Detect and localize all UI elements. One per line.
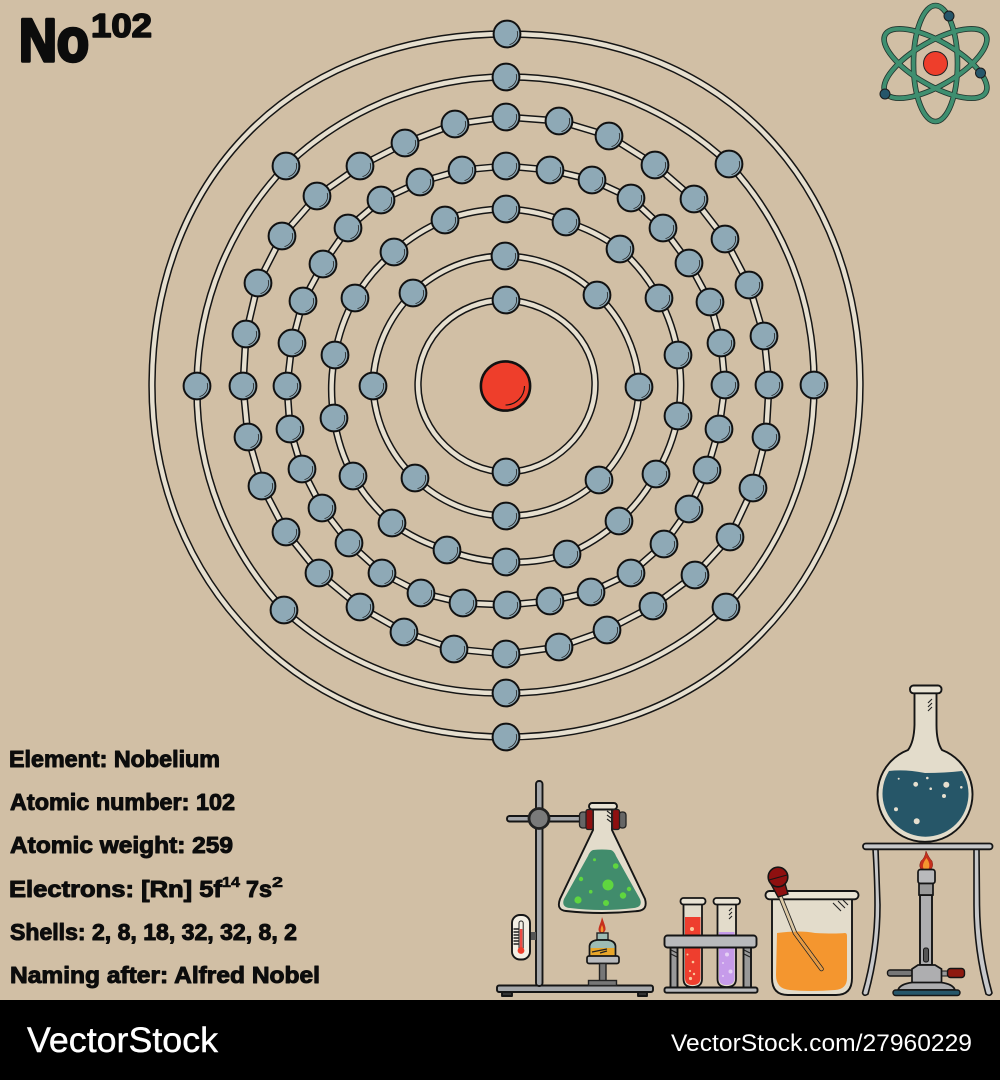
beaker with orange liquid and dropper <box>766 867 858 995</box>
rack top bar <box>664 936 756 948</box>
title: No 102 <box>19 7 152 74</box>
footer bar <box>0 1000 1000 1080</box>
round flask with blue liquid <box>878 686 972 842</box>
gas valve and handle <box>888 970 912 976</box>
beaker body <box>772 898 852 995</box>
thermometer <box>512 915 536 960</box>
tripod stand <box>862 844 992 995</box>
title: No 102: No <box>19 7 89 74</box>
shell orbits <box>152 34 860 737</box>
blue liquid <box>883 770 968 837</box>
atom diagram: electron shells <box>152 21 860 750</box>
electrons: Electrons: [Rn] 5f <box>9 876 222 902</box>
element facts text block <box>9 746 320 988</box>
watermark logo: VectorStock <box>27 1021 219 1060</box>
atomic weight: Atomic weight: 259 <box>10 832 233 858</box>
burner tube <box>920 895 932 965</box>
shell 4 electrons <box>274 153 738 618</box>
beaker rim <box>766 891 858 899</box>
flask lip <box>910 686 942 693</box>
nucleus <box>481 361 530 411</box>
red test tube <box>680 898 706 987</box>
shell 7 electrons <box>493 21 520 750</box>
electrons <box>9 874 283 902</box>
spirit burner <box>587 917 619 986</box>
test tube rack <box>664 898 758 993</box>
conical flask <box>559 803 646 913</box>
shells: Shells: 2, 8, 18, 32, 32, 8, 2 <box>10 919 297 945</box>
watermark url: VectorStock.com/27960229 <box>671 1030 972 1057</box>
flask glass <box>878 693 972 842</box>
orange liquid <box>776 932 847 991</box>
icon: atom <box>874 6 997 122</box>
bubbles <box>894 777 963 824</box>
shell 5 electrons <box>230 104 782 667</box>
flask clamp <box>580 810 626 830</box>
shell 6 electrons <box>184 64 827 706</box>
stand base <box>497 986 653 996</box>
shell 2 electrons <box>360 243 652 529</box>
rack base <box>664 988 758 993</box>
title: No 102: 102 <box>91 7 152 44</box>
naming: Naming after: Alfred Nobel <box>10 962 320 988</box>
electrons: 14 <box>222 874 241 891</box>
dropper <box>768 867 822 969</box>
burner base <box>898 982 955 990</box>
purple test tube <box>714 898 740 987</box>
shell 1 electrons <box>493 287 519 485</box>
burner flame <box>920 851 933 870</box>
electrons: 7s <box>246 876 272 902</box>
rack legs <box>670 947 751 988</box>
element name: Element: Nobelium <box>9 746 220 772</box>
electrons: 2 <box>272 874 283 891</box>
lab stand with conical flask and burner <box>497 781 653 996</box>
bunsen burner <box>888 851 964 996</box>
shell 3 electrons <box>321 196 691 575</box>
atomic number: Atomic number: 102 <box>10 789 235 815</box>
stand rods <box>507 781 585 986</box>
